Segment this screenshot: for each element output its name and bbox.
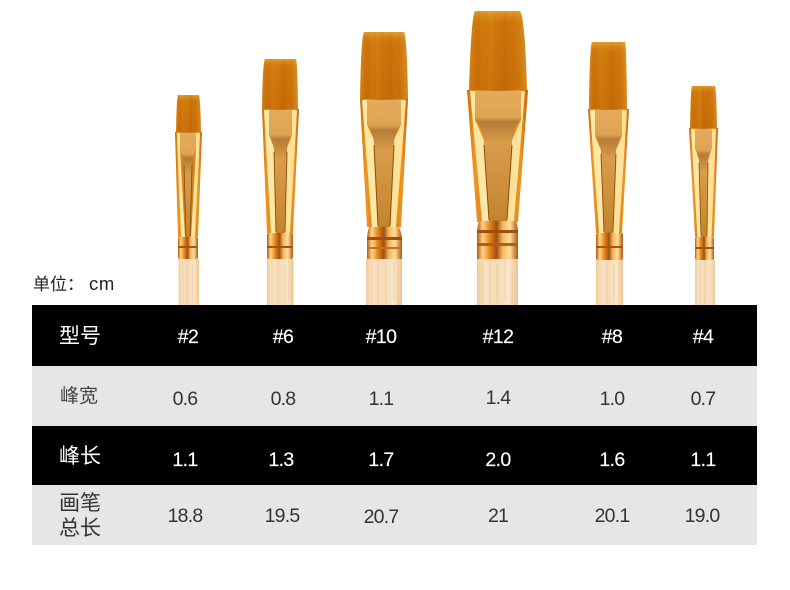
table row: model number: #8 [602,326,622,348]
brush #10 [360,32,408,305]
table row: total brush length: 19.5 [265,505,300,527]
table row: tip length: 1.1 [172,449,198,471]
table row: total brush length: 画笔 [59,492,101,515]
brush #8 [588,42,629,305]
table row: model number: 型号 [59,325,101,348]
table row: tip length: 1.1 [690,449,716,471]
table row: tip width: 1.1 [369,388,393,410]
table row: tip width: 0.8 [271,388,295,410]
table row: model number: #2 [178,326,198,348]
table row: model number [32,305,757,366]
table row: total brush length: 21 [488,505,508,527]
table row: model number: #12 [483,326,513,348]
unit label: 单位： [33,275,84,294]
table row: model number: #6 [273,326,293,348]
table row: total brush length: 20.1 [595,505,629,527]
table row: tip width: 0.6 [173,388,197,410]
table row: total brush length: 总长 [59,517,101,540]
brush #12 [467,11,528,305]
table row: tip width [32,366,757,426]
table row: tip width: 1.0 [600,388,625,410]
brush #4 [689,86,718,305]
table row: tip width: 0.7 [691,388,715,410]
table row: tip length [32,426,757,485]
table row: total brush length [32,485,757,545]
table row: tip width: 峰宽 [60,385,98,407]
table row: tip length: 1.7 [368,449,394,471]
table row: tip length: 峰长 [59,445,101,468]
table row: model number: #4 [693,326,714,348]
brush #6 [262,59,299,305]
table row: tip length: 1.6 [599,449,625,471]
table row: total brush length: 20.7 [364,506,398,528]
table row: total brush length: 19.0 [685,505,720,527]
table row: tip length: 2.0 [485,449,511,471]
unit label: cm [89,273,115,294]
brush #2 [175,95,202,305]
table row: tip length: 1.3 [268,449,294,471]
table row: tip width: 1.4 [486,387,511,409]
table row: total brush length: 18.8 [168,505,202,527]
table row: model number: #10 [366,326,397,348]
